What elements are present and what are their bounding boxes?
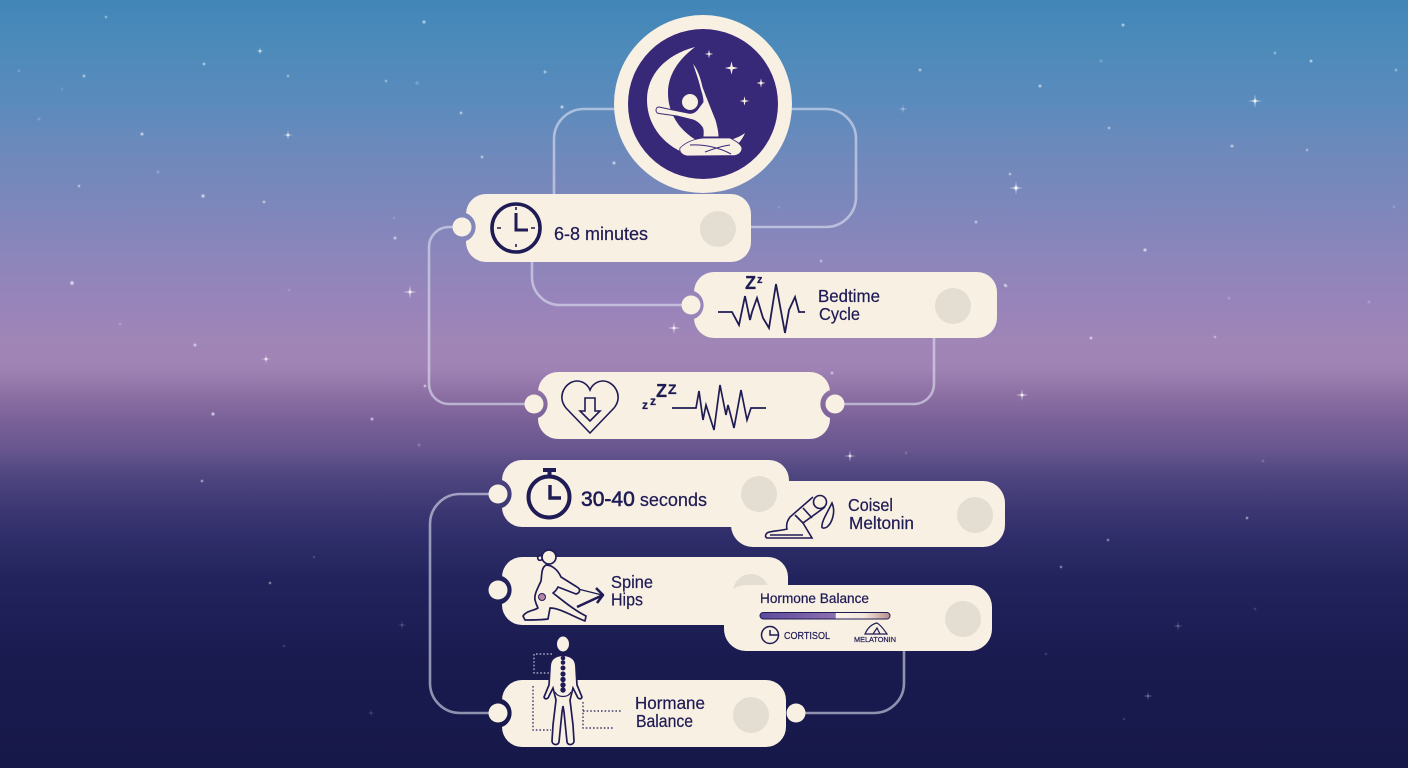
main emblem: moon and stretching figure [614,15,792,193]
icon: sleep wave: Z [668,381,677,397]
dotted annotation lines [533,654,621,730]
icon: sleep wave: z [642,398,648,412]
connector dots [488,704,806,722]
connector dot [488,484,508,504]
status circle [935,288,971,324]
status circle [741,476,777,512]
card: bedtime cycle [682,272,997,338]
icon: seated stretching figure [656,62,742,156]
label: 6-8 minutes [554,223,648,244]
icon: sleep wave: z [650,394,656,408]
label: Coisel [848,495,893,515]
icon: sleep wave [642,381,766,430]
icon: kneeling figure [766,496,834,538]
card: cortisol and melatonin [731,481,1005,547]
card: hormane balance with body: Balance [636,711,693,731]
card: spine and hips [488,550,788,625]
icon: crescent moon [647,47,745,152]
label: Spine [611,572,653,592]
connector dot [452,218,472,236]
icon: sleep wave: Z [656,381,667,401]
icon: cortisol clock [762,626,778,644]
label: Bedtime [818,286,880,306]
cortisol label: CORTISOL [784,630,830,642]
icon: small stars [705,50,766,106]
status circle [700,211,736,247]
icon: stopwatch [528,470,570,518]
card: hormane balance with body [488,636,806,747]
icon: clock [492,204,540,252]
icon: melatonin mound [865,623,887,634]
connector dot [682,296,700,314]
icon: sleep wave: Z [745,273,756,293]
melatonin label: MELATONIN [854,635,896,644]
card: spine and hips: Hips [611,590,643,610]
connector dot [488,580,508,600]
icon: sleep wave [718,273,805,333]
card: cortisol and melatonin: Meltonin [849,513,914,533]
connector lines [429,109,934,713]
icon: sleep wave: z [757,274,763,286]
card: 6-8 minutes [452,194,751,262]
status circle [733,574,769,610]
card: bedtime cycle: Cycle [819,304,860,324]
label: 30-40 seconds [581,488,707,511]
connector dots [524,394,844,414]
label: Hormane [635,693,705,713]
icon: human body with spine [544,636,582,745]
card: heart rate and sleep [524,372,844,439]
status circle [733,697,769,733]
balance bar [760,612,890,619]
status circle [945,601,981,637]
icon: heart with down arrow [562,381,618,433]
icon: lunge figure with arrow [523,550,603,621]
status circle [957,497,993,533]
card: 30-40 seconds [488,460,789,527]
card: hormone balance gauge [724,585,992,651]
heading: Hormone Balance [760,591,869,606]
